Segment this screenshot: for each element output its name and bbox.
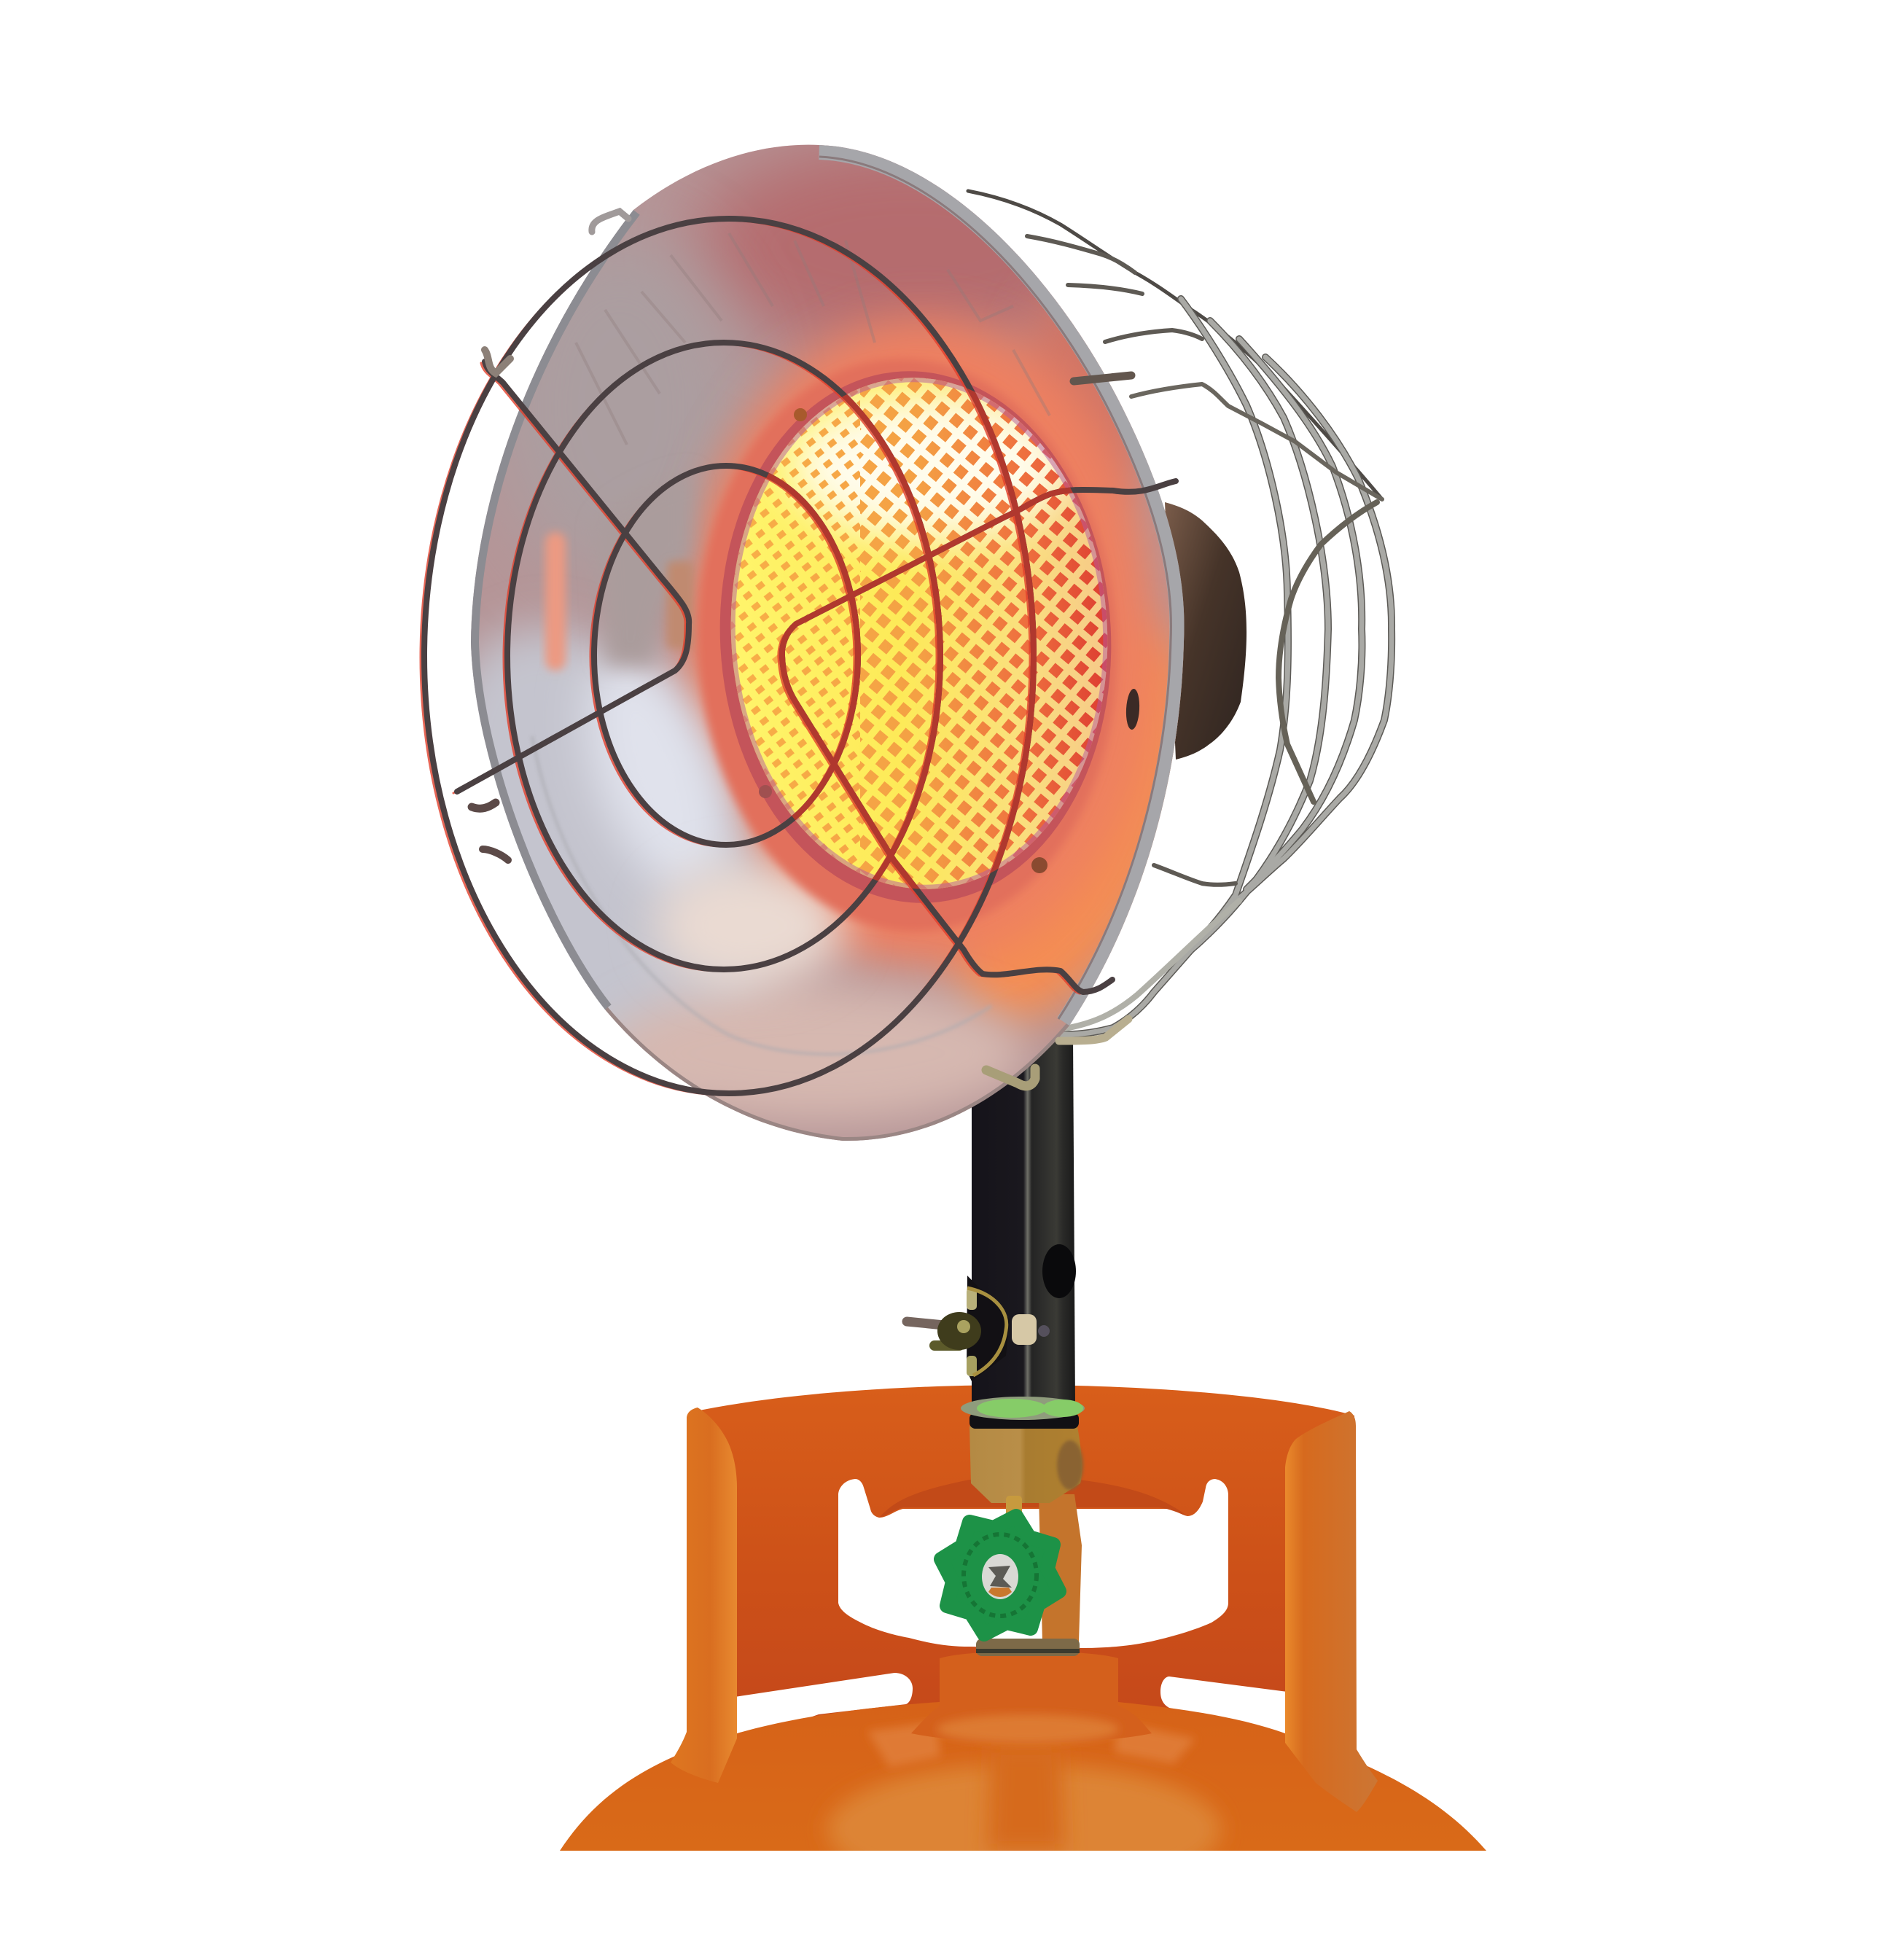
green washer	[961, 1397, 1085, 1420]
wheel inner ring	[964, 1534, 1037, 1616]
brass nut	[969, 1426, 1082, 1503]
burner cup	[684, 348, 1131, 942]
embossed lettering marks	[576, 233, 1050, 445]
warm pale patch	[656, 864, 846, 988]
warm bottom shading	[605, 984, 1028, 1123]
hot white top of mesh	[791, 394, 1068, 539]
valve body	[976, 1494, 1082, 1656]
lower left slot	[737, 1673, 913, 1733]
lower right slot	[1160, 1676, 1287, 1738]
wheel star shape	[941, 1516, 1059, 1634]
dome highlight	[824, 1722, 1225, 1851]
cylinder dome	[560, 1702, 1486, 1851]
pale silver highlight	[559, 636, 753, 909]
cylinder neck	[911, 1651, 1152, 1743]
product photo: heater on gas cylinder	[420, 144, 1486, 1851]
wing nut upper wing	[907, 1322, 944, 1325]
hub warm reflection	[988, 1588, 1012, 1597]
clamp bright tab top	[967, 1288, 977, 1310]
collar back wall	[701, 1385, 1354, 1717]
central glow	[685, 317, 1159, 966]
green valve wheel	[941, 1496, 1059, 1634]
rim clip hook	[1074, 375, 1131, 381]
inner ledge arc	[532, 736, 991, 1054]
cage top wire	[968, 191, 1382, 499]
wires glowing over mesh	[424, 219, 1176, 1093]
brass nut side screw	[1057, 1440, 1083, 1490]
cup screw right	[1031, 857, 1047, 873]
silver boss	[1012, 1314, 1037, 1345]
bracket plate	[598, 474, 692, 665]
vent hole	[1125, 689, 1140, 730]
bracket salmon bar	[545, 532, 566, 671]
red wire reflection	[421, 220, 1172, 1095]
right upper shading	[1013, 284, 1144, 532]
valve base collar	[976, 1639, 1080, 1656]
black ring under washer	[969, 1413, 1079, 1429]
ring bodies	[1061, 299, 1392, 1034]
rear burner housing	[1165, 502, 1246, 760]
bottom bracket hook	[986, 1069, 1035, 1086]
handle window cutout	[838, 1479, 1228, 1648]
cup screw top	[794, 408, 807, 421]
top clip hook	[592, 211, 628, 232]
top salmon shading	[678, 144, 1073, 357]
bolt end	[1038, 1325, 1050, 1337]
wing nut lower wing	[935, 1340, 959, 1351]
wing nut bracket	[907, 1276, 1050, 1381]
brass curved plate	[967, 1288, 1007, 1375]
lower left silver shading	[378, 577, 832, 1129]
left hooks behind reflector	[472, 803, 508, 860]
mesh purple edge	[719, 370, 1119, 897]
hub dark reflection	[988, 1566, 1012, 1588]
silver hub	[982, 1554, 1018, 1599]
lower rim wire hook	[1059, 1019, 1128, 1041]
right rim band	[819, 145, 1185, 1026]
lower long wire	[1061, 901, 1239, 1029]
neck base band	[937, 1714, 1119, 1744]
bottom edge shade	[605, 1010, 1069, 1141]
dark wire	[424, 219, 1176, 1093]
rim highlight	[819, 157, 1171, 1019]
wing nut highlight	[957, 1320, 970, 1333]
rear wire cage	[968, 191, 1392, 1034]
handle ledge	[879, 1480, 1187, 1518]
reflector dish	[471, 144, 1184, 1141]
lower cross wire	[1279, 502, 1377, 802]
pole side hole	[1042, 1244, 1076, 1298]
wing nut body	[937, 1312, 981, 1350]
front wire guard	[421, 219, 1176, 1095]
left collar strip	[671, 1408, 737, 1783]
left guard hook ring	[485, 350, 510, 373]
bracket tab	[667, 561, 693, 649]
cup screw left	[759, 785, 772, 798]
gas cylinder	[560, 1385, 1486, 1895]
left rim shade	[471, 210, 633, 1010]
lower spoke	[1154, 865, 1236, 885]
orange glow on right	[898, 590, 1245, 1058]
valve thread ring	[976, 1649, 1080, 1653]
brass valve stem	[1039, 1494, 1082, 1642]
mesh squares	[725, 372, 1113, 897]
ring shadows	[1061, 299, 1392, 1034]
right collar strip	[1285, 1411, 1378, 1812]
stem pin	[1006, 1496, 1022, 1522]
upper left mauve grey shading	[496, 233, 744, 583]
dark clamp plate	[967, 1276, 1010, 1381]
clamp bright tab bottom	[967, 1356, 977, 1376]
spokes	[1027, 236, 1135, 273]
support pole	[972, 1035, 1075, 1407]
ceramic burner mesh	[719, 370, 1119, 897]
